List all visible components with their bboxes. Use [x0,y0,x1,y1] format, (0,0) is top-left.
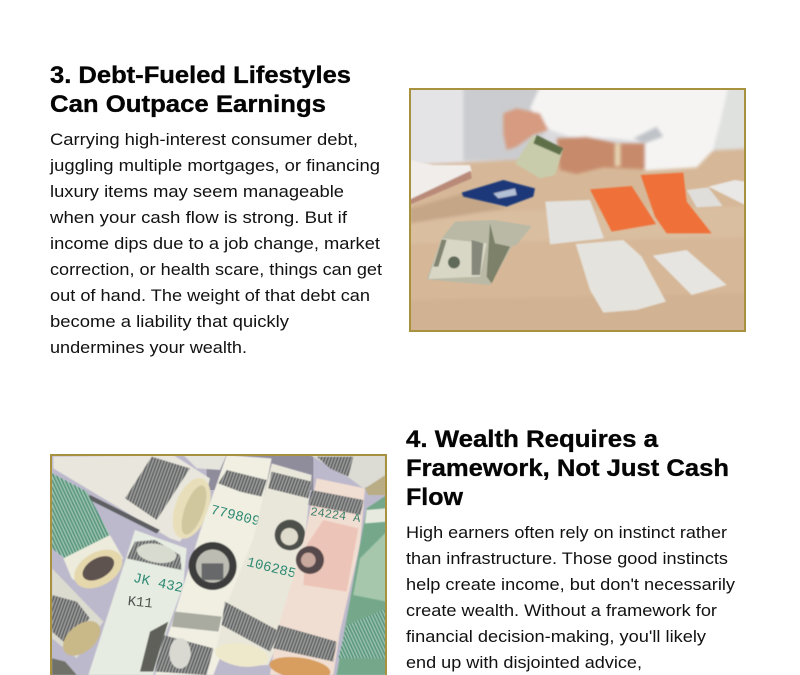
text block: section 4 body: than infrastructure. Those good instincts [406,549,728,568]
text block: section 3 body: income dips due to a job change, market [50,234,380,253]
heading: section 3 [50,62,351,118]
white receipts [545,180,745,313]
serial text on portrait bill: 106285 [245,555,298,583]
heading: section 4 [406,426,729,511]
section 4: wealth requires a framework [50,426,736,675]
text block: section 3 body: luxury items may seem manageable [50,182,344,201]
roll: bottom-left [52,568,107,675]
text block: section 3 body: when your cash flow is strong. But if [49,208,347,227]
serial text on pink bill: 24224 A [309,505,362,526]
serial text on central bill: 779809 [209,503,262,530]
text block: section 3 body [49,130,382,357]
text block: section 4 body: help create income, but don't necessarily [406,575,736,594]
serial text on 20 bill [128,573,182,608]
roll: central bill with seal [155,455,272,675]
text block: section 4 body: create wealth. Without a framework for [406,601,717,620]
serial text on 20 bill: K11 [127,594,154,613]
photo: hands counting cash over receipts on a wooden desk [407,85,750,337]
wall and table background [407,85,750,337]
text block: section 4 body: High earners often rely on instinct rather [406,523,727,542]
serial text on 20 bill: JK 432 [132,571,184,597]
roll: pink-tinted bill [268,478,365,675]
heading: section 4: Framework, Not Just Cash [406,455,729,482]
white shirt and arms [503,87,728,174]
roll: top-left bill [53,455,218,544]
photo: rolled US dollar bills [50,453,387,675]
text block: section 3 body: out of hand. The weight of that debt can [50,286,370,305]
orange envelopes [590,173,712,233]
banknotes on table [427,220,532,285]
text block: section 4 body [406,523,736,672]
heading: section 3: Can Outpace Earnings [50,91,326,118]
heading: section 4: Flow [406,484,464,511]
text block: section 3 body: juggling multiple mortgages, or financing [49,156,380,175]
roll: green right [337,495,387,675]
text block: section 4 body: financial decision-making, you'll likely [406,627,707,646]
text block: section 3 body: Carrying high-interest consumer debt, [50,130,358,149]
roll: 20 bill with serial [88,530,187,675]
gold frame [410,89,745,331]
heading: section 3: 3. Debt-Fueled Lifestyles [50,62,351,89]
roll: top-right bill [183,455,385,495]
roll: bill with portrait letter seal [214,463,312,670]
notebook [410,160,472,205]
text block: section 3 body: correction, or health scare, things can get [50,260,382,279]
gold frame [51,455,386,675]
heading: section 4: 4. Wealth Requires a [406,426,658,453]
roll: green left [52,473,124,589]
lilac table background [50,453,387,675]
banknotes in hand [515,135,563,178]
blue calculator [462,180,535,207]
text block: section 3 body: become a liability that quickly [50,312,290,331]
text block: section 4 body: end up with disjointed advice, [406,653,642,672]
text block: section 3 body: undermines your wealth. [50,338,247,357]
section 3: debt-fueled lifestyles [49,62,750,357]
